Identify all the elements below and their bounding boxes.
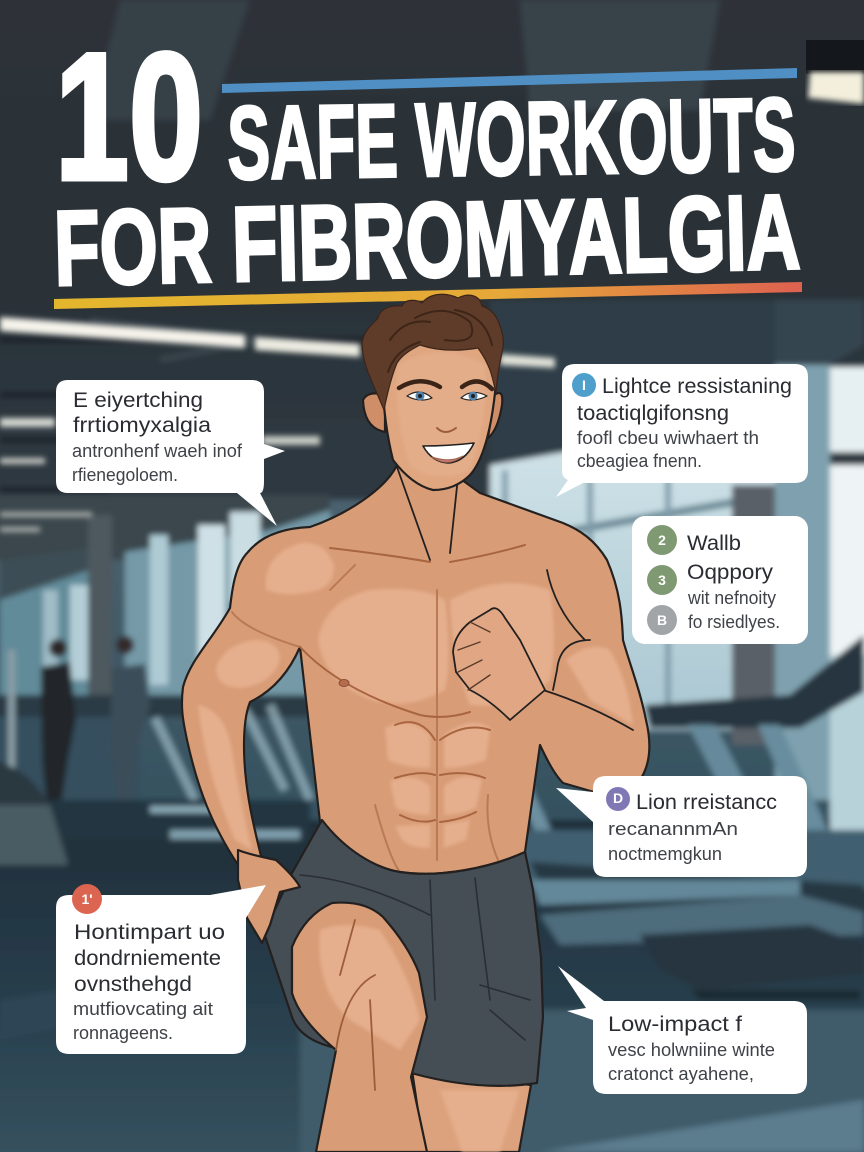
smile <box>423 443 474 463</box>
muscle lines <box>232 545 525 872</box>
callout: lower right: D <box>613 790 623 806</box>
callout: bottom left: 1' <box>81 891 93 907</box>
neck lines <box>397 467 458 560</box>
badge red <box>72 884 102 914</box>
distant people <box>41 662 76 800</box>
badge 2 <box>647 525 677 555</box>
hand on chest <box>453 608 545 720</box>
right treadmills <box>645 635 864 728</box>
callout: bottom left: ronnageens. <box>73 1023 173 1043</box>
knee highlight <box>319 925 420 1050</box>
callout: middle right: 3 <box>658 572 666 588</box>
callout: top left: frrtiomyxalgia <box>73 414 211 437</box>
callout: middle right: Oqppory <box>687 561 774 584</box>
ear right <box>488 393 502 438</box>
badge 1 <box>572 373 596 397</box>
leg highlight <box>440 1090 520 1152</box>
callout: bottom left: mutfiovcating ait <box>73 999 213 1019</box>
ceiling lights <box>0 317 555 532</box>
bicep and forearm lines <box>543 570 633 730</box>
callout: middle right: fo rsiedlyes. <box>688 612 780 632</box>
eyes <box>407 392 487 400</box>
callout: lower right: Lion rreistancc <box>636 791 777 814</box>
nose <box>437 428 456 432</box>
shorts folds <box>300 875 530 1040</box>
title number 10: 10 <box>55 16 203 218</box>
left windows <box>125 510 330 700</box>
right window wall <box>490 300 780 460</box>
body silhouette with arms <box>182 465 649 874</box>
skin highlights <box>198 543 633 850</box>
badge 3 <box>647 565 677 595</box>
nipple <box>339 680 349 686</box>
floor glare <box>540 1100 864 1152</box>
lower hand on hip <box>238 850 300 943</box>
callout: middle right: Wallb <box>687 532 741 555</box>
exercise bike <box>0 760 68 860</box>
callout: lower right: recanannmAn <box>608 819 738 839</box>
callout: bottom left: Hontimpart uo <box>74 921 225 944</box>
ceiling beams <box>90 0 250 120</box>
badge D <box>606 787 630 811</box>
callout: middle right: 2 <box>658 532 666 548</box>
callout: top right: cbeagiea fnenn. <box>577 451 702 471</box>
badge B <box>647 605 677 635</box>
left treadmill row <box>0 695 310 717</box>
ear left <box>363 393 385 432</box>
gradient rule <box>54 282 802 309</box>
callout: middle right: B <box>657 612 667 628</box>
callout: top right <box>556 364 808 497</box>
callout: lower right <box>556 776 807 877</box>
callout: middle right: wit nefnoity <box>687 588 776 608</box>
callout: top right: foofl cbeu wiwhaert th <box>577 428 759 448</box>
callout: top left: antronhenf waeh inof <box>72 441 243 461</box>
eyebrows <box>399 381 492 389</box>
blue rule <box>222 68 797 93</box>
callout: middle right <box>632 516 808 644</box>
callout: top left <box>56 380 285 526</box>
callout: top left: E eiyertching <box>73 389 203 412</box>
back walls <box>0 495 330 560</box>
callout: bottom right: Low-impact f <box>608 1013 742 1036</box>
callout: bottom right: vesc holwniine winte <box>608 1040 775 1060</box>
hair curls <box>388 310 492 372</box>
callout: top right: toactiqlgifonsng <box>577 402 729 425</box>
callout: top right: Lightce ressistaning <box>602 375 792 398</box>
callout: bottom left: dondrniemente <box>74 947 221 970</box>
callout: top left: rfienegoloem. <box>72 465 178 485</box>
callout: bottom right: cratonct ayahene, <box>608 1064 754 1084</box>
callout: top right: I <box>582 377 586 393</box>
callout: lower right: noctmemgkun <box>608 844 722 864</box>
title <box>53 16 802 309</box>
callout: bottom left <box>56 884 266 1054</box>
face <box>382 340 496 490</box>
hair <box>362 294 503 410</box>
face highlight <box>397 352 485 476</box>
shorts <box>264 820 543 1086</box>
raised thigh and knee <box>292 903 427 1152</box>
illustrated man <box>182 294 649 1152</box>
callout: bottom left: ovnsthehgd <box>74 973 192 996</box>
right leg <box>412 1070 531 1152</box>
callout: bottom right <box>558 966 807 1094</box>
